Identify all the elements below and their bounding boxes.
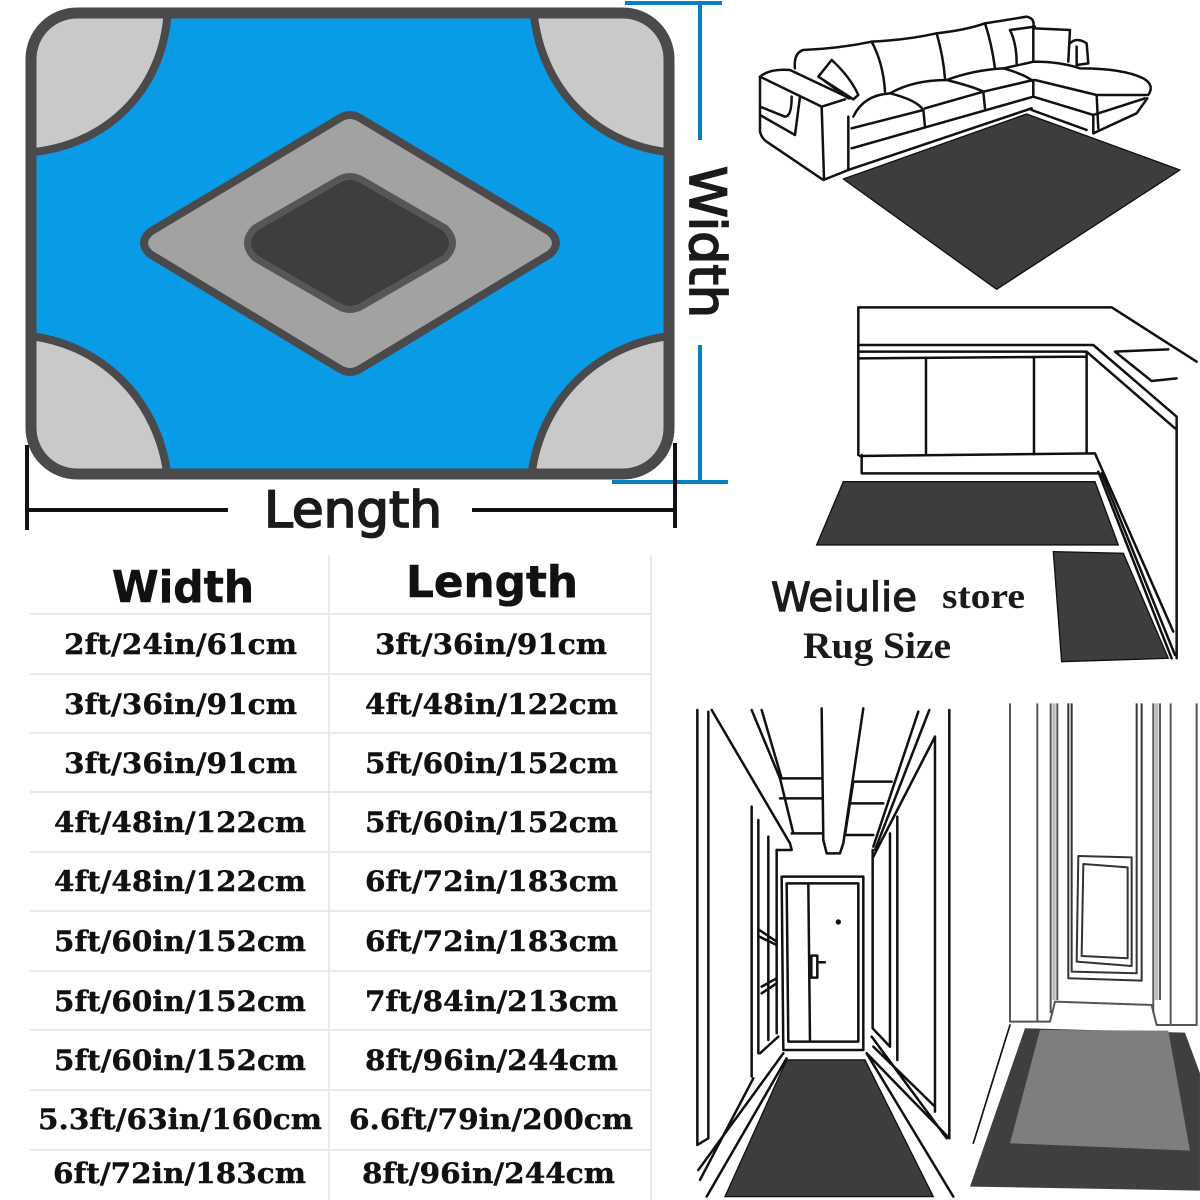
door frame xyxy=(782,877,863,1050)
illustration: corridor with window xyxy=(970,703,1200,1191)
window frame xyxy=(1068,703,1142,981)
length dimension xyxy=(27,443,675,539)
illustration: hallway with door xyxy=(697,708,953,1197)
rug base xyxy=(31,13,669,474)
rug inner panel xyxy=(1010,1030,1190,1151)
table rows: 4ft/48in/122cm xyxy=(54,806,306,839)
width dimension xyxy=(612,3,736,482)
store title: store xyxy=(942,576,1025,616)
store title xyxy=(771,575,1025,667)
table rows: 5ft/60in/152cm xyxy=(54,985,306,1018)
store title: Weiulie xyxy=(771,575,917,621)
table header: length: Length xyxy=(406,557,578,608)
table rows: 6ft/72in/183cm xyxy=(365,925,618,958)
rug inner diamond xyxy=(248,176,452,310)
table rows: 7ft/84in/213cm xyxy=(365,985,618,1018)
door peephole xyxy=(836,919,841,925)
rug corners xyxy=(20,5,680,480)
short runner rug xyxy=(1053,552,1168,662)
table rows: 4ft/48in/122cm xyxy=(54,865,306,898)
rug size diagram xyxy=(20,5,680,480)
door handle xyxy=(811,956,825,978)
table rows: 5ft/60in/152cm xyxy=(365,747,618,780)
hallway runner xyxy=(725,1060,933,1197)
illustration: sofa with rug xyxy=(760,17,1180,289)
table rows: 5.3ft/63in/160cm xyxy=(38,1103,322,1136)
width label: Width xyxy=(678,166,736,318)
table rows: 5ft/60in/152cm xyxy=(54,1044,306,1077)
table rows: 5ft/60in/152cm xyxy=(54,925,306,958)
size table xyxy=(30,555,651,1200)
corridor rug xyxy=(970,1028,1200,1191)
rug outer diamond xyxy=(144,115,556,372)
table rows: 6ft/72in/183cm xyxy=(365,865,618,898)
table header: width: Width xyxy=(112,562,254,613)
table rows: 5ft/60in/152cm xyxy=(365,806,618,839)
illustration: kitchen with runners xyxy=(817,307,1197,662)
table rows: 3ft/36in/91cm xyxy=(64,688,297,721)
rug border xyxy=(31,13,669,474)
table rows: 3ft/36in/91cm xyxy=(64,747,297,780)
table rows: 8ft/96in/244cm xyxy=(365,1044,618,1077)
long runner rug xyxy=(817,482,1118,545)
table rows: 4ft/48in/122cm xyxy=(365,688,618,721)
table rows: 6ft/72in/183cm xyxy=(53,1157,306,1190)
table rows: 3ft/36in/91cm xyxy=(375,628,607,661)
length label: Length xyxy=(264,481,442,539)
store title: Rug Size xyxy=(803,626,951,667)
table rows: 6.6ft/79in/200cm xyxy=(349,1103,633,1136)
table rows: 8ft/96in/244cm xyxy=(362,1157,615,1190)
table rows xyxy=(38,628,633,1190)
table rows: 2ft/24in/61cm xyxy=(64,628,297,661)
